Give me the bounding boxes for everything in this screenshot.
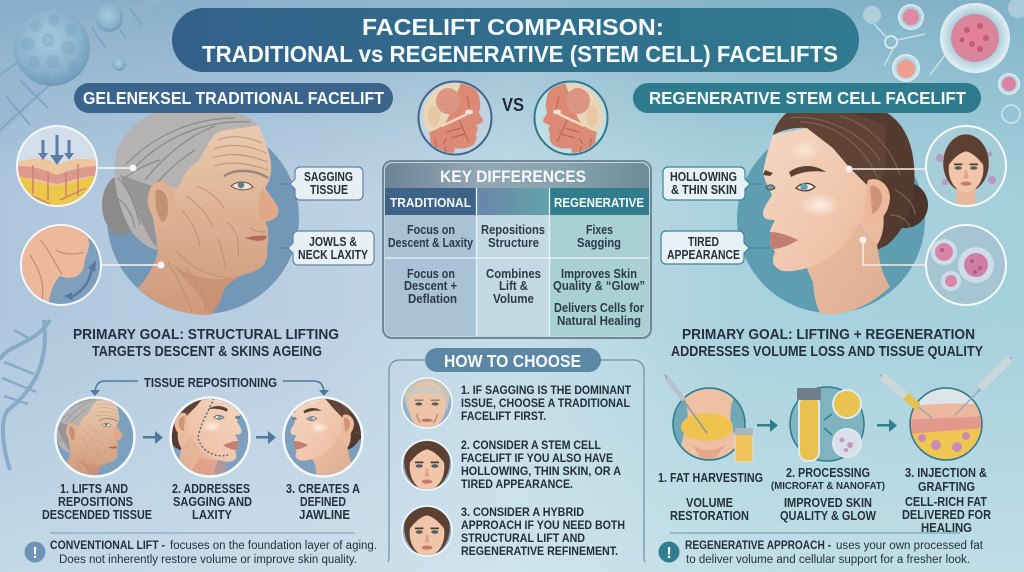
table heading: KEY DIFFERENCES (440, 168, 586, 186)
column: traditional: TRADITIONAL (390, 196, 471, 210)
step 3: injection and grafting: 3. INJECTION & (905, 466, 987, 480)
step 3: injection and grafting (880, 357, 1012, 535)
option 1 (401, 377, 631, 429)
note: regenerative approach: REGENERATIVE APPROACH - (685, 540, 831, 552)
step 1: lifts and repositions: 1. LIFTS AND (60, 482, 128, 496)
arrow: fat step 1 to 2 (757, 419, 778, 432)
step 2: addresses sagging: LAXITY (192, 508, 233, 522)
primary goal text: PRIMARY GOAL: STRUCTURAL LIFTING (73, 326, 339, 343)
column: traditional: Focus on (407, 267, 455, 281)
connector: temple to inset (846, 166, 926, 172)
column: middle: Repositions (481, 223, 545, 237)
tissue repositioning label and arrows: TISSUE REPOSITIONING (144, 375, 277, 390)
step 3: creates a jawline: DEFINED (300, 495, 346, 509)
step 2: addresses sagging (169, 396, 252, 519)
column: middle: Lift & (499, 279, 528, 293)
callout: jowls and neck laxity: JOWLS & (309, 235, 357, 249)
option 3 (401, 505, 624, 557)
step 2: processing: 2. PROCESSING (786, 466, 870, 480)
column: regenerative: Quality & “Glow” (553, 279, 645, 293)
column: middle: Structure (488, 236, 539, 250)
heading: traditional (74, 83, 393, 113)
column: middle: Combines (486, 267, 541, 281)
connector: neck to inset (860, 236, 926, 265)
callout: sagging tissue (278, 167, 363, 200)
column: traditional: Deflation (408, 292, 457, 306)
note: regenerative approach (658, 540, 984, 566)
heading: how to choose: HOW TO CHOOSE (444, 351, 581, 371)
panel: traditional facelift (17, 83, 393, 566)
step 3: creates a jawline: JAWLINE (299, 508, 350, 522)
step 2: processing (771, 387, 885, 523)
column: middle: Volume (493, 292, 534, 306)
portrait: older woman profile (102, 108, 299, 315)
panel: regenerative facelift (633, 83, 1012, 566)
title: TRADITIONAL vs REGENERATIVE (STEM CELL) FACELIFTS (202, 41, 838, 67)
step 2: addresses sagging: 2. ADDRESSES (172, 482, 250, 496)
column: regenerative: Sagging (577, 236, 621, 250)
option 2: FACELIFT IF YOU ALSO HAVE (461, 451, 613, 465)
note: conventional lift (24, 540, 377, 566)
option 2: 2. CONSIDER A STEM CELL (461, 438, 601, 452)
heading: regenerative: REGENERATIVE STEM CELL FACELIFT (649, 88, 966, 108)
option 2: TIRED APPEARANCE. (461, 477, 573, 491)
primary goal text: TARGETS DESCENT & SKINS AGEING (92, 343, 322, 360)
note: conventional lift: focuses on the foundation layer of aging. (170, 540, 377, 552)
inset: sagging tissue layers (17, 126, 97, 215)
step 1: fat harvesting: RESTORATION (670, 509, 749, 523)
option 2: HOLLOWING, THIN SKIN, OR A (461, 464, 621, 478)
callout: sagging tissue: SAGGING (304, 170, 353, 184)
option 3: STRUCTURAL LIFT AND (461, 531, 585, 545)
option 1: FACELIFT FIRST. (461, 409, 546, 423)
arrow: step 1 to 2 (143, 431, 163, 444)
inset: jowls close-up (21, 225, 101, 305)
title (172, 8, 859, 72)
step 3: creates a jawline: 3. CREATES A (286, 482, 360, 496)
option 3: APPROACH IF YOU NEED BOTH (461, 518, 625, 532)
callout: tired appearance: APPEARANCE (667, 248, 740, 262)
step 1: lifts and repositions: DESCENDED TISSUE (42, 508, 152, 522)
step 2: processing: QUALITY & GLOW (780, 509, 876, 523)
arrow: step 2 to 3 (256, 431, 276, 444)
note: regenerative approach: to deliver volume and cellular support for a fresher look. (686, 554, 970, 566)
column: traditional (385, 188, 476, 336)
connector: inset to neck (101, 262, 164, 268)
step 3: injection and grafting: DELIVERED FOR (902, 508, 991, 522)
column: regenerative: Natural Healing (557, 314, 641, 328)
heading: traditional: GELENEKSEL TRADITIONAL FACELIFT (83, 88, 384, 108)
step 2: processing: IMPROVED SKIN (784, 496, 872, 510)
step 2: processing: (MICROFAT & NANOFAT) (771, 480, 885, 492)
inset: front face (926, 126, 1006, 216)
step 2: addresses sagging: SAGGING AND (173, 495, 252, 509)
step 3: injection and grafting: GRAFTING (918, 480, 975, 494)
column: traditional: Descent & Laxity (388, 236, 473, 250)
VS label: VS (502, 95, 524, 115)
step 3: injection and grafting: CELL-RICH FAT (905, 495, 987, 509)
panel: how to choose (388, 348, 645, 572)
column: traditional: Descent + (404, 279, 457, 293)
step 1: fat harvesting: 1. FAT HARVESTING (658, 471, 763, 485)
column: traditional: Focus on (407, 223, 455, 237)
callout: hollowing and thin skin: HOLLOWING (670, 170, 737, 184)
callout: jowls and neck laxity: NECK LAXITY (298, 248, 369, 262)
option 1: 1. IF SAGGING IS THE DOMINANT (461, 383, 632, 397)
note: conventional lift: Does not inherently restore volume or improve skin quality. (59, 554, 357, 566)
option 3: 3. CONSIDER A HYBRID (461, 505, 584, 519)
decoration: bubbles and molecules top right (863, 0, 1024, 123)
note: conventional lift: CONVENTIONAL LIFT - (50, 540, 165, 552)
inset: stem cells (926, 225, 1006, 305)
column: regenerative: Delivers Cells for (554, 301, 644, 315)
primary goal text: PRIMARY GOAL: LIFTING + REGENERATION (682, 326, 975, 343)
option 2 (401, 439, 621, 491)
portrait: younger woman profile (737, 107, 928, 314)
column: middle (477, 188, 549, 336)
decoration: DNA and cells top left (0, 0, 164, 136)
tissue repositioning label and arrows (90, 375, 329, 396)
title: FACELIFT COMPARISON: (362, 14, 664, 40)
decoration: DNA helix lower left (0, 320, 50, 470)
icon: left facial anatomy (418, 82, 492, 156)
step 3: injection and grafting: HEALING (921, 521, 972, 535)
callout: tired appearance: TIRED (688, 235, 719, 249)
callout: hollowing and thin skin (663, 167, 762, 200)
step 1: lifts and repositions (42, 391, 152, 522)
step 1: fat harvesting: VOLUME (686, 496, 733, 510)
icon: right facial anatomy (534, 82, 608, 156)
connector: inset to hair (97, 164, 136, 172)
callout: hollowing and thin skin: & THIN SKIN (671, 183, 737, 197)
primary goal text (73, 326, 339, 360)
column: regenerative: Improves Skin (561, 267, 637, 281)
panel: key differences table (383, 161, 651, 338)
column: regenerative (550, 188, 649, 336)
callout: sagging tissue: TISSUE (310, 183, 348, 197)
step 1: lifts and repositions: REPOSITIONS (58, 495, 133, 509)
primary goal text (671, 326, 983, 360)
table heading (385, 163, 649, 188)
note: conventional lift: ! (32, 545, 38, 562)
note: regenerative approach: ! (666, 545, 672, 562)
anatomy comparison (418, 82, 608, 156)
note: regenerative approach: uses your own processed fat (836, 540, 984, 552)
option 3: REGENERATIVE REFINEMENT. (461, 544, 618, 558)
step 1: fat harvesting (658, 375, 763, 523)
column: regenerative: REGENERATIVE (554, 196, 644, 210)
option 1: ISSUE, CHOOSE A TRADITIONAL (461, 396, 630, 410)
callout: tired appearance (661, 231, 770, 264)
heading: regenerative (633, 83, 981, 113)
step 3: creates a jawline (282, 396, 364, 519)
column: regenerative: Fixes (586, 223, 613, 237)
arrow: fat step 2 to 3 (877, 419, 897, 432)
callout: jowls and neck laxity (276, 231, 374, 265)
